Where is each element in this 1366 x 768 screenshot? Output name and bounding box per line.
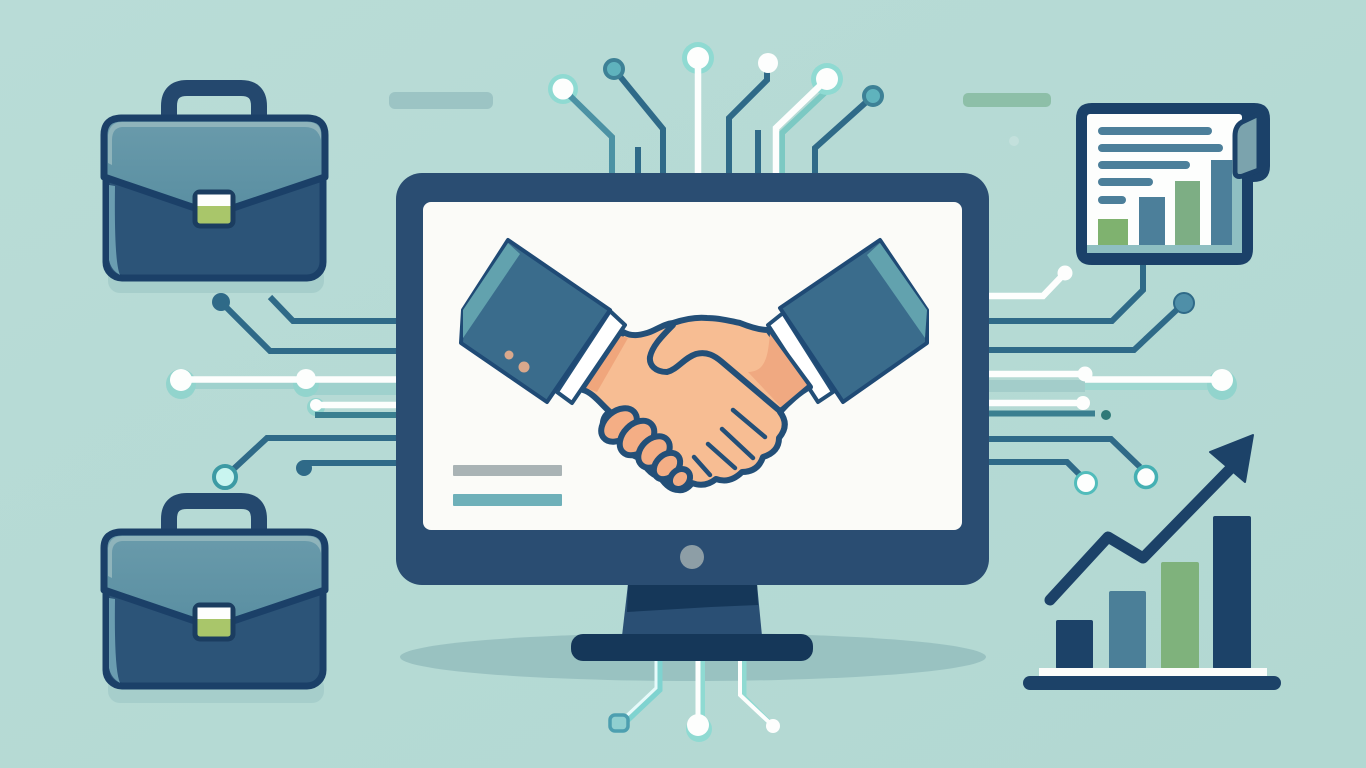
stand shadow xyxy=(400,633,986,681)
clasp xyxy=(195,605,233,639)
case body xyxy=(106,118,323,278)
monitor bezel xyxy=(396,173,989,585)
handle xyxy=(169,88,259,118)
decorative pill right xyxy=(963,93,1051,107)
flap xyxy=(104,118,325,208)
finger lines xyxy=(694,410,765,475)
monitor stand neck xyxy=(622,584,762,636)
bars xyxy=(1098,160,1232,245)
document report panel xyxy=(1076,103,1270,265)
faint dot xyxy=(1009,136,1019,146)
baseline highlight xyxy=(1039,668,1267,678)
flap highlight xyxy=(108,122,321,165)
monitor screen xyxy=(423,202,962,530)
circuit lines: bottom xyxy=(610,661,780,742)
sleeve button 1 xyxy=(504,350,514,360)
circuit lines: right xyxy=(989,265,1237,494)
left cuff xyxy=(557,311,625,403)
clasp highlight xyxy=(198,608,230,619)
arrow head xyxy=(1210,435,1253,482)
screen text bar gray xyxy=(453,465,562,476)
side highlight xyxy=(109,185,120,275)
sleeve button 2 xyxy=(518,362,530,372)
flap highlight xyxy=(108,536,321,578)
clasped hands xyxy=(583,318,810,490)
left sleeve xyxy=(461,240,610,402)
right sleeve xyxy=(780,240,927,402)
page edge xyxy=(1087,160,1242,253)
shadow xyxy=(108,675,324,703)
bar 1 xyxy=(1056,620,1093,669)
folded tab xyxy=(1235,114,1259,176)
thumb xyxy=(650,323,781,412)
side highlight xyxy=(109,598,120,683)
clasp xyxy=(195,192,233,226)
screen text bar teal xyxy=(453,494,562,506)
handshake xyxy=(461,240,927,493)
monitor xyxy=(396,173,989,661)
text lines xyxy=(1098,127,1223,204)
case body xyxy=(106,532,323,686)
growth bar chart xyxy=(1023,435,1281,690)
bar 3 xyxy=(1161,562,1199,669)
circuit lines: top xyxy=(548,42,882,173)
monitor base xyxy=(571,634,813,661)
power button xyxy=(680,545,704,569)
left wrist shade xyxy=(586,336,628,392)
right cuff xyxy=(768,313,833,402)
handle xyxy=(169,501,259,532)
circuit lines: left xyxy=(166,293,396,488)
bar 2 xyxy=(1109,591,1146,669)
knuckles xyxy=(595,401,694,493)
right sleeve fold xyxy=(867,243,927,338)
briefcase: bottom xyxy=(104,501,325,703)
right wrist shade xyxy=(748,334,807,407)
shadow xyxy=(108,265,324,293)
flap xyxy=(104,532,325,621)
left sleeve fold xyxy=(463,243,520,338)
frame xyxy=(1076,103,1270,265)
decorative pill left xyxy=(389,92,493,109)
page xyxy=(1087,114,1242,253)
trend line xyxy=(1050,467,1232,600)
briefcase: top xyxy=(104,88,325,293)
clasp highlight xyxy=(198,194,230,206)
stand neck shadow xyxy=(627,584,758,612)
thumb outline xyxy=(650,325,781,412)
baseline xyxy=(1023,676,1281,690)
bar 4 xyxy=(1213,516,1251,669)
